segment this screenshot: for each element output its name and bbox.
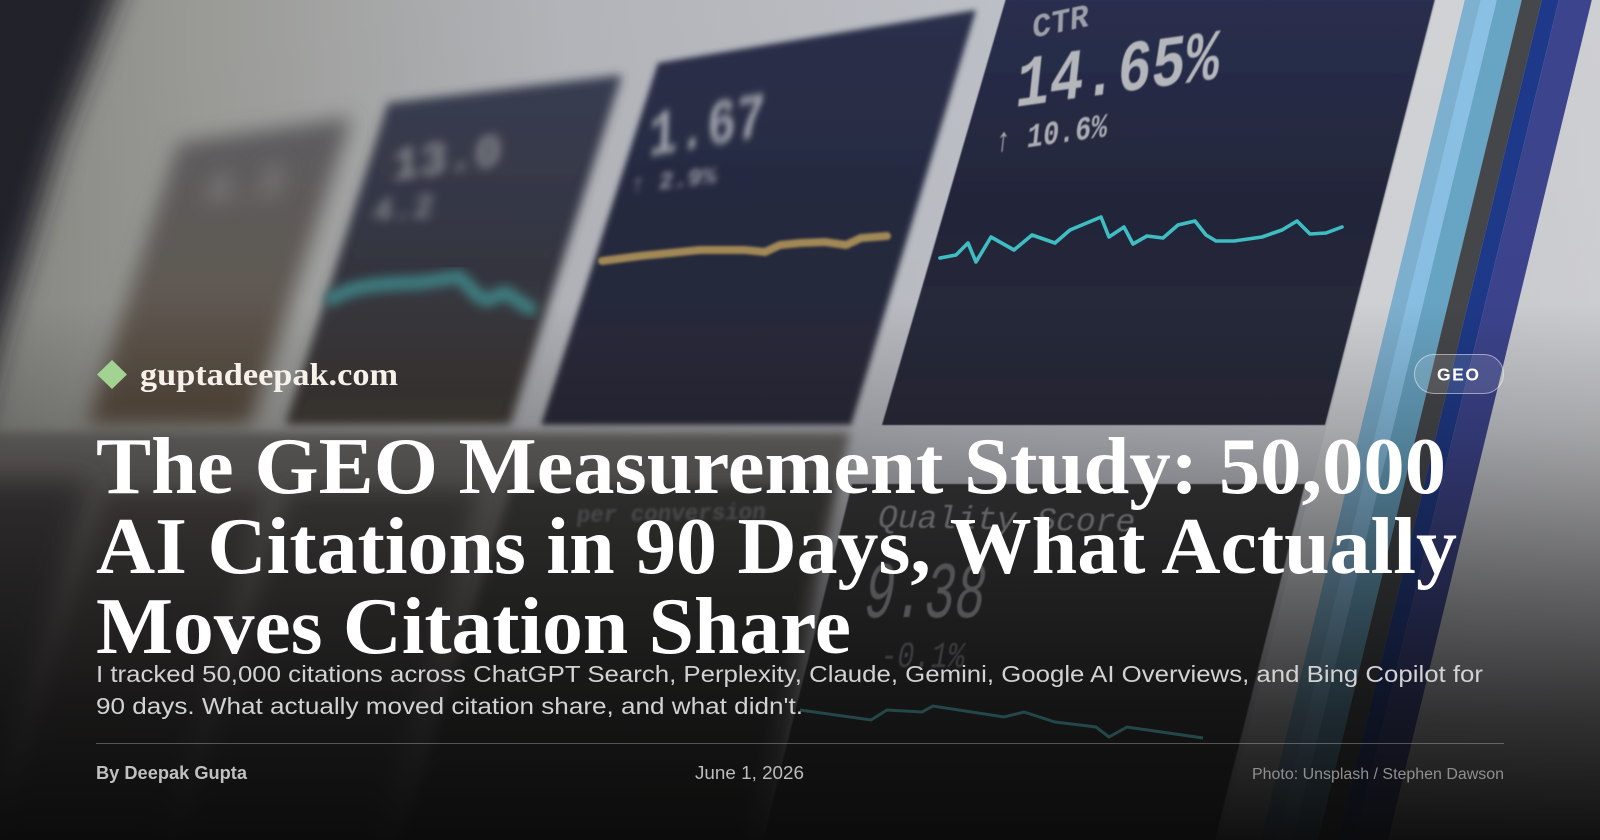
- byline: By Deepak Gupta: [96, 763, 248, 783]
- dashboard card 4: 14.65%: [1012, 17, 1224, 129]
- subtitle: 90 days. What actually moved citation share, and what didn't.: [96, 693, 803, 719]
- brand name: guptadeepak.com: [140, 356, 398, 392]
- faint quality score panel text: 9.38: [857, 551, 994, 642]
- category tag: GEO: [1437, 364, 1479, 384]
- faint quality score panel text: Quality Score: [873, 500, 1139, 542]
- coloured stripes at screen edge: [1261, 0, 1593, 840]
- dashboard card 1, heavily blurred: [87, 117, 352, 425]
- dashboard card 4: [882, 0, 1436, 425]
- dashboard card 3: ↑ 2.9%: [629, 164, 718, 200]
- dashboard card 3: [541, 10, 976, 425]
- second row of dashboard cards: [0, 432, 1305, 840]
- photo credit: Photo: Unsplash / Stephen Dawson: [1252, 766, 1504, 783]
- title: The GEO Measurement Study: 50,000: [96, 423, 1446, 511]
- dashboard card 1, heavily blurred: 4.3: [205, 158, 285, 219]
- dashboard card 4: CTR: [1032, 0, 1090, 48]
- brand mark: [97, 356, 398, 392]
- title: AI Citations in 90 Days, What Actually: [96, 503, 1457, 591]
- dashboard card 3: 1.67: [647, 84, 767, 176]
- dashboard card 4: ↑ 10.6%: [993, 109, 1110, 163]
- date: June 1, 2026: [695, 763, 804, 783]
- title: Moves Citation Share: [96, 583, 851, 671]
- faint quality score panel text: per conversion: [575, 500, 767, 529]
- category tag: [1414, 354, 1504, 394]
- dark room at left edge: [0, 0, 130, 500]
- subtitle: I tracked 50,000 citations across ChatGPT Search, Perplexity, Claude, Gemini, Google AI Overviews, and Bing Copilot for: [96, 661, 1483, 687]
- dashboard card 2: [285, 75, 622, 425]
- dashboard card 2: 4.2: [371, 189, 435, 233]
- footer rule: [96, 743, 1504, 744]
- dashboard card 2: 13.0: [392, 125, 503, 194]
- faint quality score panel text: [575, 500, 1203, 738]
- bright bezel beside card 4: [1220, 0, 1468, 840]
- icon: green diamond: [97, 360, 127, 389]
- subtitle: [96, 661, 1483, 719]
- faint quality score panel text: -0.1%: [877, 637, 969, 678]
- title: [96, 423, 1457, 671]
